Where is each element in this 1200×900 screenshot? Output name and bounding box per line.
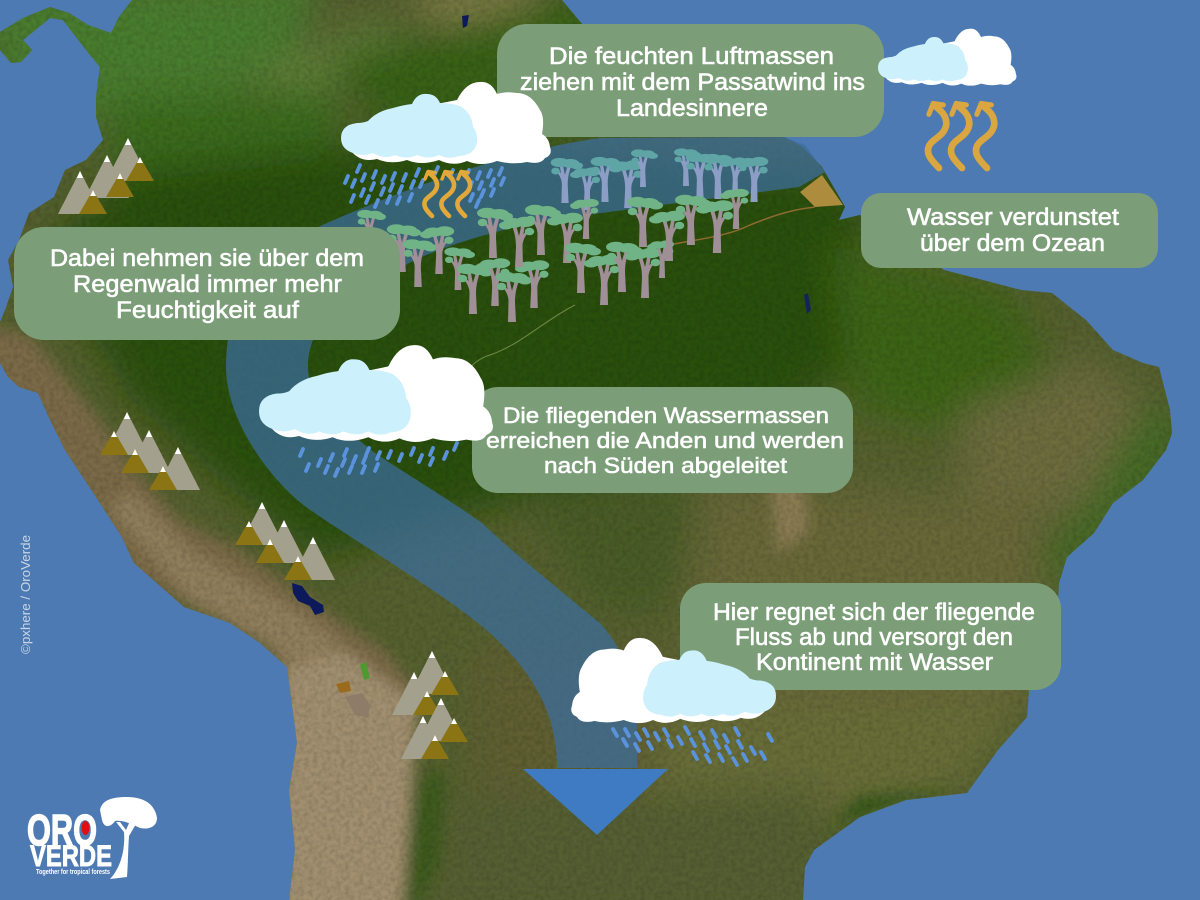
logo: Oro Verde: Together for tropical forests bbox=[36, 869, 110, 876]
mountains: southern Andes bbox=[392, 651, 468, 759]
callout: rainfall over continent bbox=[680, 583, 1061, 690]
cloud over the ocean bbox=[878, 29, 1016, 86]
rain under rainforest cloud bbox=[345, 165, 504, 207]
callout: moisture uptake over rainforest bbox=[14, 227, 400, 340]
evaporation arrows over ocean bbox=[928, 103, 994, 168]
callout: rainfall over continent: Kontinent mit Wasser bbox=[756, 649, 993, 676]
flying river band bbox=[226, 137, 825, 768]
callout: rainfall over continent: Fluss ab und versorgt den bbox=[735, 624, 1013, 651]
rainforest trees in the band bbox=[551, 148, 768, 210]
logo: Oro Verde bbox=[27, 797, 157, 879]
callout: Andes diversion: Die fliegenden Wassermassen bbox=[503, 403, 829, 428]
cloud over rainforest bbox=[341, 82, 551, 164]
callout: Andes diversion: nach Süden abgeleitet bbox=[544, 453, 788, 478]
mountains: central Andes bbox=[235, 502, 335, 580]
callout: rainfall over continent: Hier regnet sich der fliegende bbox=[713, 599, 1035, 626]
rain under southern cloud bbox=[613, 727, 772, 765]
callout: moisture uptake over rainforest: Dabei nehmen sie über dem bbox=[50, 245, 364, 272]
logo: Oro Verde: ORO bbox=[27, 806, 97, 855]
callout: evaporation: Wasser verdunstet bbox=[907, 204, 1119, 231]
mountains: Peruvian Andes bbox=[100, 412, 200, 490]
callout: Passat wind: ziehen mit dem Passatwind ins bbox=[520, 69, 865, 96]
mountains: northern Andes bbox=[58, 138, 154, 214]
callout: Passat wind: Die feuchten Luftmassen bbox=[549, 43, 834, 70]
photo credit: ©pxhere / OroVerde bbox=[18, 535, 33, 654]
cloud raining over the continent bbox=[571, 638, 776, 723]
callout: Andes diversion: erreichen die Anden und werden bbox=[486, 428, 844, 453]
callout: Passat wind: Landesinnere bbox=[616, 95, 768, 122]
rainforest trees on land bbox=[357, 189, 749, 322]
callout: moisture uptake over rainforest: Feuchtigkeit auf bbox=[116, 297, 299, 324]
map details: lakes, salt flats and amazon mouth bbox=[292, 15, 843, 718]
arrowhead of flying river bbox=[523, 769, 668, 835]
callout: moisture uptake over rainforest: Regenwald immer mehr bbox=[73, 271, 342, 298]
evaporation arrows over rainforest bbox=[424, 172, 470, 216]
callout: evaporation: über dem Ozean bbox=[920, 230, 1105, 257]
rain under Andes cloud bbox=[300, 443, 457, 476]
callout: Passat wind bbox=[497, 24, 884, 137]
cloud at the Andes bbox=[259, 345, 493, 442]
callout: evaporation bbox=[861, 193, 1158, 268]
callout: Andes diversion bbox=[472, 387, 853, 493]
logo: Oro Verde: VERDE bbox=[30, 840, 112, 873]
